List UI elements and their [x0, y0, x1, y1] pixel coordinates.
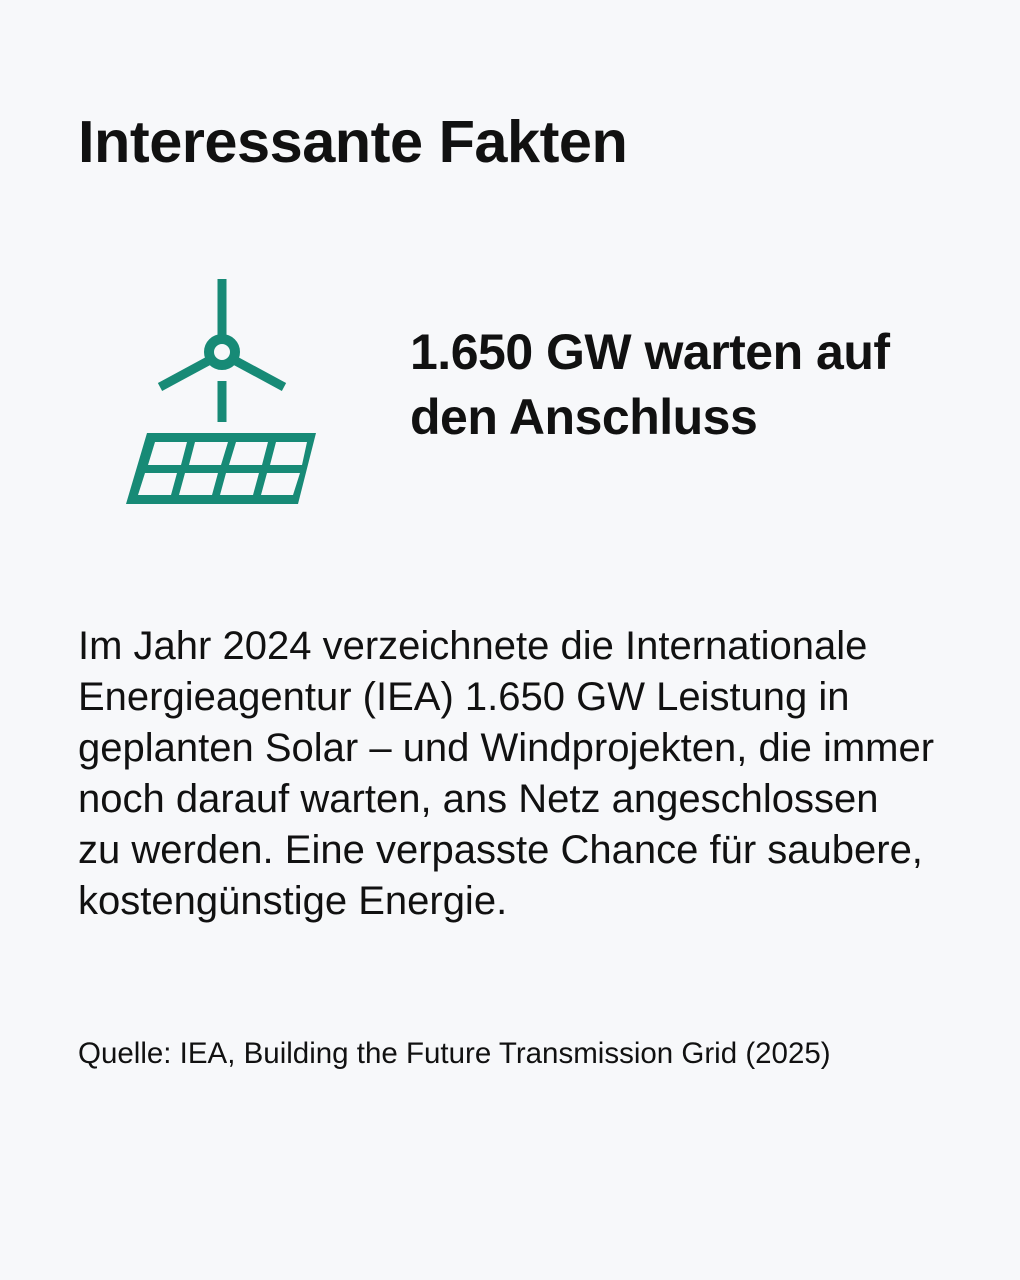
icon: wind turbine and solar panel — [126, 279, 316, 504]
body text: kostengünstige Energie. — [78, 879, 507, 923]
body text: geplanten Solar – und Windprojekten, die immer — [78, 726, 934, 770]
body text: Im Jahr 2024 verzeichnete die Internationale — [78, 624, 867, 668]
title: Interessante Fakten — [78, 108, 627, 175]
body text: Energieagentur (IEA) 1.650 GW Leistung in — [78, 675, 850, 719]
body text: noch darauf warten, ans Netz angeschlossen — [78, 777, 878, 821]
body text — [78, 624, 934, 923]
body text: zu werden. Eine verpasste Chance für saubere, — [78, 828, 923, 872]
heading: 1.650 GW — [410, 324, 890, 445]
source: Quelle: IEA, Building the Future Transmission Grid (2025) — [78, 1037, 831, 1070]
heading: 1.650 GW: den Anschluss — [410, 389, 757, 445]
heading: 1.650 GW: 1.650 GW warten auf — [410, 324, 890, 380]
